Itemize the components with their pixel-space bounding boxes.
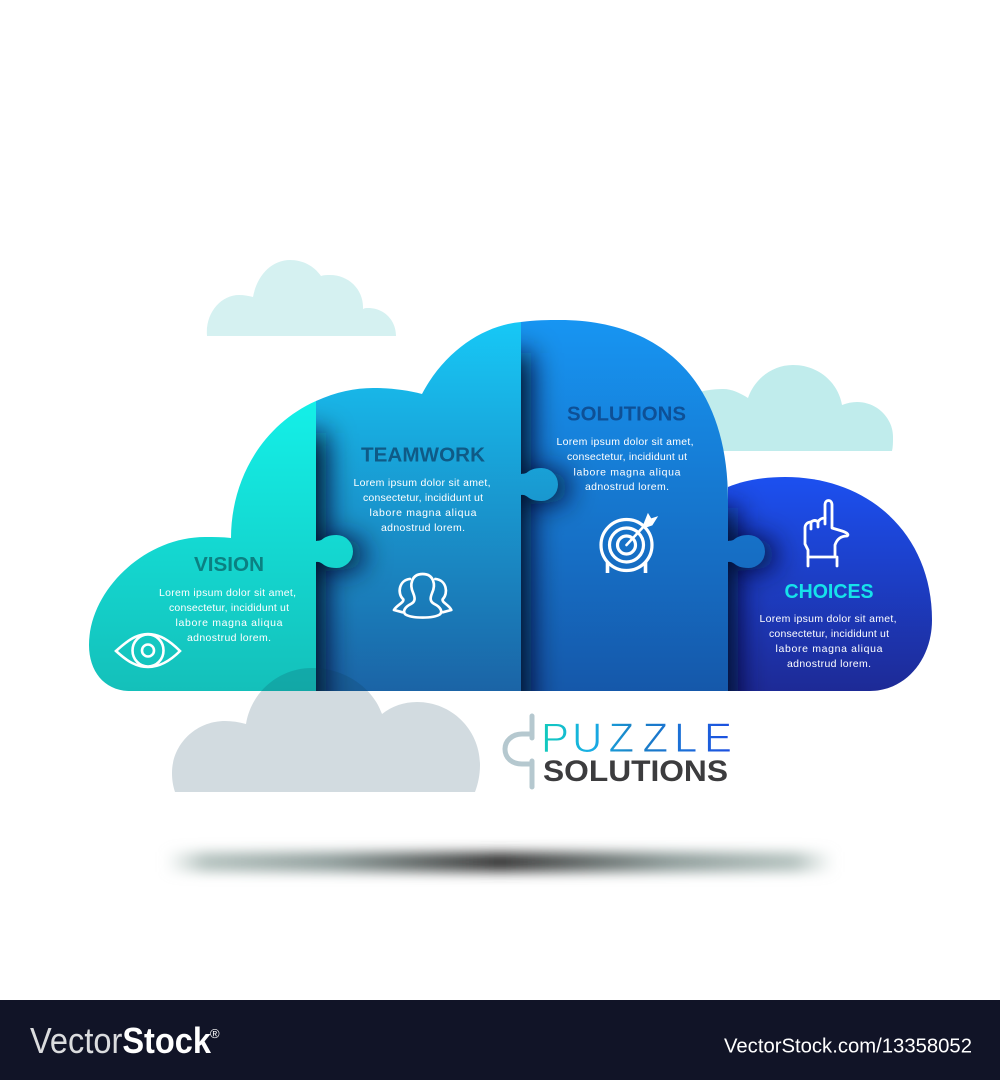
- section: solutions text: adnostrud lorem.: [585, 481, 669, 493]
- section: choices text: [760, 581, 896, 670]
- section: choices text: CHOICES: [784, 581, 874, 603]
- icon: team: [394, 574, 451, 618]
- section: choices text: Lorem ipsum dolor sit amet,: [760, 613, 896, 625]
- footer bar: ®: [210, 1026, 220, 1041]
- section: choices text: consectetur, incididunt ut: [769, 628, 889, 640]
- cloud: right: [690, 365, 893, 451]
- piece: teamwork: [316, 322, 558, 691]
- piece: solutions: [521, 320, 765, 691]
- section: teamwork text: consectetur, incididunt ut: [363, 492, 483, 504]
- section: solutions text: SOLUTIONS: [567, 404, 686, 426]
- section: choices text: labore magna aliqua: [776, 643, 883, 655]
- section: teamwork text: Lorem ipsum dolor sit amet,: [354, 477, 490, 489]
- section: solutions text: labore magna aliqua: [574, 466, 681, 478]
- section: solutions text: Lorem ipsum dolor sit amet,: [556, 436, 694, 448]
- cloud: top left: [207, 260, 396, 336]
- footer logo: VectorStock: [30, 1020, 212, 1061]
- section: teamwork text: [354, 444, 490, 534]
- section: vision text: Lorem ipsum dolor sit amet,: [159, 587, 296, 599]
- icon: eye: [116, 634, 180, 667]
- logo: puzzle solutions: PUZZLE: [541, 714, 732, 761]
- section: vision text: consectetur, incididunt ut: [169, 602, 289, 614]
- section: solutions text: consectetur, incididunt ut: [567, 451, 687, 463]
- footer bar: VectorStock.com/13358052: [724, 1036, 972, 1058]
- ground shadow: [165, 852, 835, 872]
- icon: pointing hand: [805, 500, 848, 566]
- icon: target: [601, 514, 657, 573]
- section: vision text: labore magna aliqua: [176, 617, 283, 629]
- section: teamwork text: labore magna aliqua: [370, 507, 477, 519]
- section: solutions text: [556, 404, 694, 493]
- section: teamwork text: adnostrud lorem.: [381, 522, 465, 534]
- section: vision text: adnostrud lorem.: [187, 632, 271, 644]
- section: choices text: adnostrud lorem.: [787, 658, 871, 670]
- footer bar: [0, 1000, 1000, 1080]
- section: teamwork text: TEAMWORK: [361, 444, 486, 466]
- section: vision text: VISION: [194, 554, 264, 576]
- piece: choices: [728, 477, 932, 691]
- logo: puzzle solutions: SOLUTIONS: [543, 755, 728, 788]
- cloud: bottom grey: [172, 668, 480, 792]
- logo: puzzle solutions: [505, 714, 732, 788]
- section: vision text: [159, 554, 296, 644]
- logo icon: puzzle piece outline: [505, 716, 532, 787]
- piece: vision: [89, 401, 353, 691]
- cloud overlap on puzzle pieces: [262, 668, 368, 691]
